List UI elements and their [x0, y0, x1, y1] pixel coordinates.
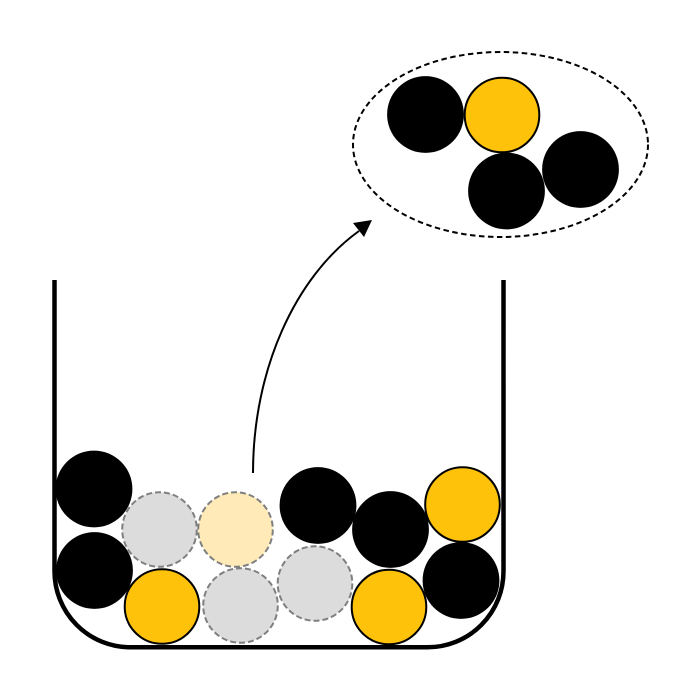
container [54, 280, 504, 647]
sample ellipse [353, 52, 648, 237]
arrow: sample drawn from container [253, 220, 372, 473]
balls in container [56, 451, 500, 644]
sampled balls [387, 76, 619, 229]
